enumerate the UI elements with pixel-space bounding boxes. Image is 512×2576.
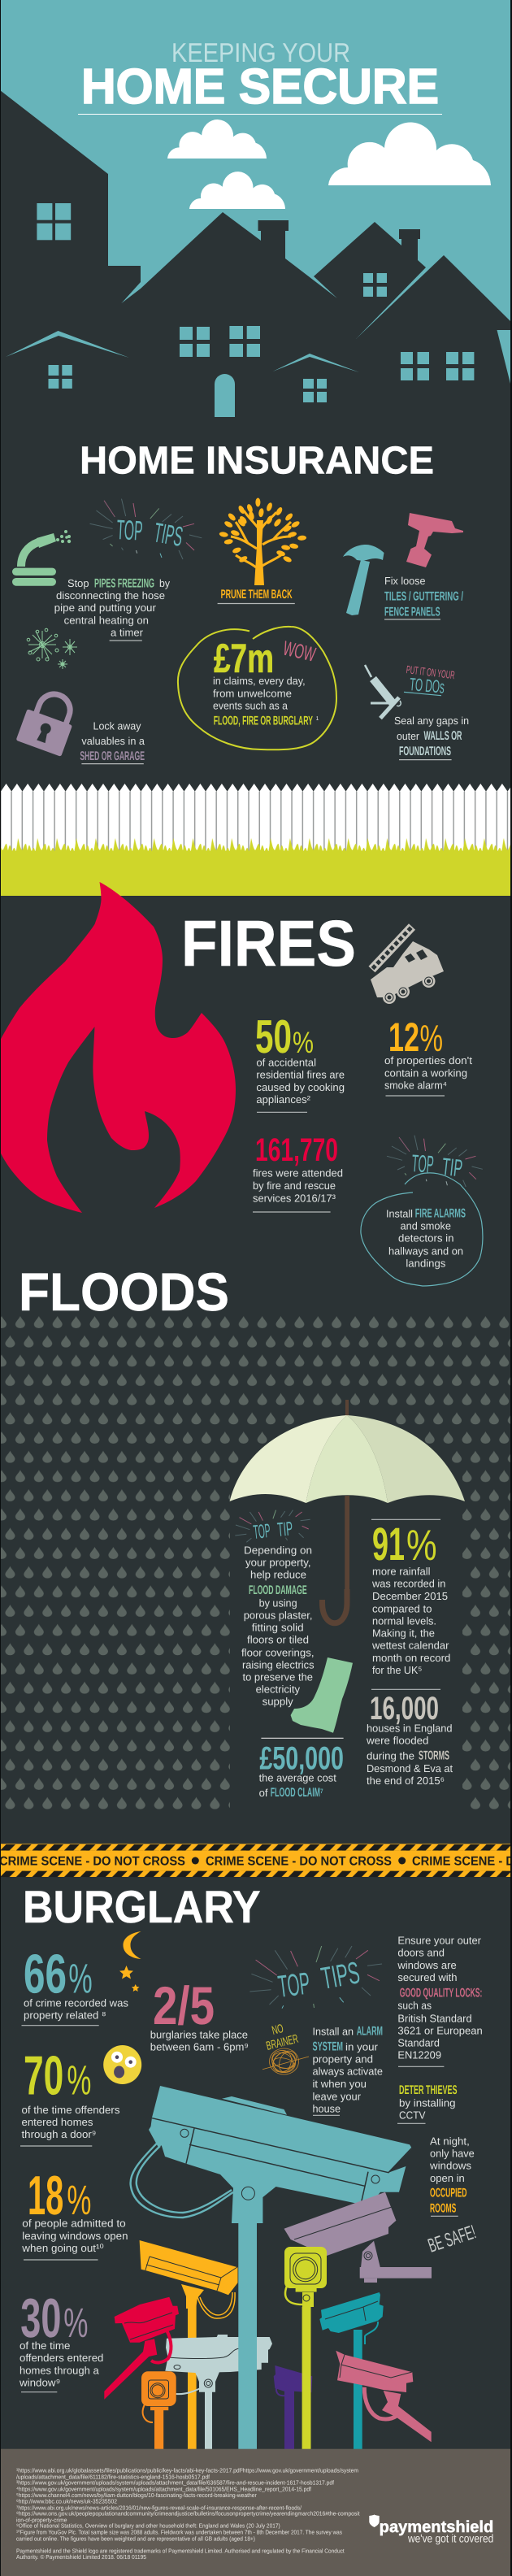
text: good quality locks: British Standard xyxy=(397,2012,472,2024)
stat: £50,000: FLOOD CLAIM⁷ xyxy=(271,1786,323,1800)
top tips badge: TOP xyxy=(116,515,144,547)
footnotes: ³https://www.gov.uk/government/uploads/system/uploads/attachment_data/file/636587/fire-and-rescue-incident-1617-hosb1317.pdf xyxy=(16,2479,334,2487)
panel: burglary xyxy=(19,1881,483,2449)
stat: 30%: homes through a xyxy=(20,2364,99,2376)
scribble xyxy=(263,2046,309,2077)
grass blades xyxy=(0,837,512,857)
stat: 30% xyxy=(19,2287,103,2392)
footnotes: ⁴https://www.gov.uk/government/uploads/system/uploads/attachment_data/file/501065/EHS_Headline_report_2014-15.pdf xyxy=(16,2485,311,2492)
text: seal any gaps xyxy=(394,715,469,760)
text: install alarm: ALARM xyxy=(357,2024,383,2038)
claims highlight: FLOOD, FIRE OR BURGLARY xyxy=(214,714,313,728)
stat: 30%: of the time xyxy=(20,2339,70,2352)
icon: wellington boot xyxy=(291,1657,353,1733)
stat: 18%: % xyxy=(67,2177,91,2223)
footnotes: ¹⁰Figure from YouGov Plc. Total sample size was 2088 adults. Fieldwork was undertaken between 7th - 8th December 2017. The survey was xyxy=(16,2529,342,2536)
stat: 91%: for the UK⁵ xyxy=(372,1664,423,1676)
text: lock away: Lock away xyxy=(93,720,141,732)
text: stop pipes freezing: Stop xyxy=(67,577,89,589)
footnotes xyxy=(16,2467,360,2561)
footnotes: Authority. © Paymentshield Limited 2018. 06/18 01195 xyxy=(16,2553,146,2561)
tip copy: your property, xyxy=(245,1557,310,1569)
text: stop pipes freezing: PIPES FREEZING xyxy=(94,577,154,590)
rays xyxy=(235,1510,310,1542)
icon: shield xyxy=(369,2514,380,2527)
rays xyxy=(387,1136,483,1187)
icon: fire engine xyxy=(371,927,444,1004)
text: stop pipes freezing: pipe and putting your xyxy=(54,602,157,614)
panel: footer xyxy=(0,2449,512,2576)
stat: £50,000: £50,000 xyxy=(259,1741,344,1777)
tip copy line 3: detectors in xyxy=(398,1232,453,1245)
stat: 91%: % xyxy=(406,1522,437,1570)
house details: windows, door and eaves xyxy=(6,203,512,417)
icon: cloud small xyxy=(167,119,267,159)
top tips lettering second word: TIPS xyxy=(319,1956,362,1996)
panel: home insurance xyxy=(0,439,512,896)
top tip lettering second word: TIP xyxy=(440,1153,464,1183)
text: stop pipes freezing: by xyxy=(159,577,170,589)
camera: pale grey xyxy=(165,2335,272,2449)
tip copy: electricity xyxy=(256,1683,300,1696)
camera: large teal xyxy=(131,2086,412,2449)
stat: 91%: was recorded in xyxy=(371,1578,445,1590)
stat: 161,770: by fire and rescue xyxy=(253,1179,336,1192)
stat: 50%: caused by cooking xyxy=(256,1081,345,1093)
stat: 30%: 30 xyxy=(20,2287,62,2349)
stat: 50%: 50 xyxy=(255,1010,292,1063)
grass xyxy=(0,837,512,896)
tip copy: by using xyxy=(259,1597,297,1609)
stat: £50,000 xyxy=(259,1738,344,1800)
tip copy: supply xyxy=(263,1696,293,1708)
stat: 16,000: houses in England xyxy=(367,1722,452,1735)
stat: 66%: property related ⁸ xyxy=(24,2009,106,2022)
house silhouettes xyxy=(0,90,512,439)
heading: fires: FIRES xyxy=(181,907,356,980)
text: install alarm: SYSTEM xyxy=(312,2040,343,2053)
stat: 16,000: during the xyxy=(367,1749,414,1761)
camera: crimson xyxy=(104,2297,179,2400)
icon: tree xyxy=(219,497,306,585)
text: occupied rooms: ROOMS xyxy=(430,2202,456,2216)
text: install alarm: Install an xyxy=(312,2025,354,2037)
stat: 91%: normal levels. xyxy=(372,1614,436,1627)
stat: 66% xyxy=(21,1944,128,2026)
heading: home insurance: HOME INSURANCE xyxy=(80,439,434,483)
text: install alarm: it when you xyxy=(312,2078,367,2090)
rain cut-out xyxy=(230,1409,462,1821)
stat: 66%: 66 xyxy=(24,1944,67,2005)
stat: £50,000: the average cost xyxy=(259,1772,336,1784)
stat: 70%: of the time offenders xyxy=(21,2104,120,2116)
hand-drawn ring xyxy=(178,627,336,749)
text: good quality locks: Standard xyxy=(397,2036,440,2048)
footnotes: ⁶http://www.bbc.co.uk/news/uk-35235502 xyxy=(16,2497,117,2504)
sky xyxy=(0,0,512,439)
wow lettering: WOW xyxy=(281,637,318,667)
icon: drill xyxy=(406,513,463,567)
put it on your to dos note xyxy=(404,663,456,697)
stat: 18%: of people admitted to xyxy=(22,2217,126,2229)
stat: 161,770: services 2016/17³ xyxy=(253,1192,336,1204)
title rule xyxy=(78,114,442,115)
claims copy: in claims, every day, xyxy=(213,675,306,687)
picket gaps xyxy=(0,792,512,857)
footnotes: carried out online. The figures have been weighted and are representative of all GB adults (aged 18+) xyxy=(16,2535,255,2542)
fence xyxy=(0,784,512,857)
text: good quality locks: secured with xyxy=(397,1971,457,1983)
stat: 18%: leaving windows open xyxy=(22,2230,128,2242)
footnotes: ⁷https://www.abi.org.uk/news/news-articles/2016/01/new-figures-reveal-scale-of-insurance-response-after-recent-floods/ xyxy=(16,2504,302,2511)
panel: fires xyxy=(0,882,483,1286)
tip copy line 5: landings xyxy=(406,1257,446,1269)
tip copy line 2: and smoke xyxy=(400,1220,451,1232)
stat: 161,770: fires were attended xyxy=(253,1167,343,1179)
tip copy: floor coverings, xyxy=(241,1646,314,1658)
tip copy: porous plaster, xyxy=(244,1609,312,1622)
stat: 50%: % xyxy=(293,1026,314,1059)
title: home secure: HOME SECURE xyxy=(81,59,439,114)
text: fix loose: TILES / GUTTERING / xyxy=(384,590,463,604)
stat: 16,000: were flooded xyxy=(366,1735,429,1747)
icon: hammer xyxy=(343,545,384,615)
icon: snowflakes xyxy=(27,628,77,669)
stat: 30%: offenders entered xyxy=(20,2352,103,2364)
heading: burglary: BURGLARY xyxy=(23,1881,261,1932)
top tip: fire alarms: TOP xyxy=(411,1150,435,1179)
title: keeping your: KEEPING YOUR xyxy=(171,37,350,67)
footnotes: ion-of-property-crime xyxy=(16,2516,67,2523)
stat: 16,000 xyxy=(366,1691,453,1787)
top tip: fire alarms xyxy=(361,1136,483,1286)
stat: 16,000: STORMS xyxy=(419,1748,449,1762)
camera: mauve xyxy=(284,2192,432,2283)
callout: £7m in claims xyxy=(178,627,336,749)
icon: shocked emoji xyxy=(103,2045,141,2084)
stat: 2/5: burglaries take place xyxy=(150,2029,248,2041)
stat: 12%: contain a working xyxy=(384,1066,467,1079)
text: lock away: valuables in a xyxy=(81,735,145,747)
stat: 12%: % xyxy=(419,1017,443,1059)
stat: £50,000: of xyxy=(259,1787,268,1799)
text: occupied rooms: windows xyxy=(429,2160,472,2172)
text: fix loose: FENCE PANELS xyxy=(384,605,440,619)
top tip: flood damage: TOP xyxy=(252,1520,271,1544)
footnotes: ¹https://www.abi.org.uk/globalassets/files/publications/public/key-facts/abi-key-facts-2017.pdf²https://www.gov.uk/government/uploads/system xyxy=(16,2467,358,2474)
crime scene tape: CRIME SCENE - DO NOT CROSS xyxy=(0,1855,185,1868)
stat: 18%: when going out¹⁰ xyxy=(21,2242,104,2254)
claims copy line 2: from unwelcome xyxy=(213,688,292,699)
top tip lettering second word: TIP xyxy=(276,1518,293,1541)
heading: floods: FLOODS xyxy=(19,1262,229,1322)
stat: 16,000: the end of 2015⁶ xyxy=(367,1775,445,1787)
tip copy: FLOOD DAMAGE xyxy=(249,1583,307,1597)
stat: 30%: % xyxy=(63,2300,88,2346)
text: seal any gaps: FOUNDATIONS xyxy=(399,745,451,758)
tip copy: raising electrics xyxy=(242,1658,315,1670)
tip copy xyxy=(241,1544,315,1708)
text: good quality locks: such as xyxy=(397,2000,432,2012)
footnotes: ⁵https://www.channel4.com/news/by/liam-dutton/blogs/10-fascinating-facts-record-breaking-weather xyxy=(16,2491,257,2499)
claims copy line 3: events such as a xyxy=(213,699,289,712)
top tips badge xyxy=(89,499,202,559)
stat: 91%: compared to xyxy=(372,1602,432,1614)
icon: cloud middle xyxy=(189,172,285,209)
stat: 70%: through a door⁹ xyxy=(21,2128,96,2140)
crime scene tape: CRIME SCENE - DO NOT CROSS xyxy=(206,1855,392,1868)
paymentshield logo xyxy=(369,2514,493,2545)
text: seal any gaps: WALLS OR xyxy=(424,729,462,743)
camera: pink xyxy=(336,2351,432,2442)
tip copy: to preserve the xyxy=(242,1670,313,1683)
text: prune them back: PRUNE THEM BACK xyxy=(221,588,293,602)
footnotes: ⁸https://www.ons.gov.uk/peoplepopulationandcommunity/crimeandjustice/bulletins/focusonpropertycrime/yearendingmarch2016#the-composit xyxy=(16,2510,360,2517)
icon: moon and stars xyxy=(119,1931,141,1992)
no brainer badge xyxy=(263,2022,309,2077)
text: prune them back xyxy=(218,588,295,603)
stat: 50%: of accidental xyxy=(256,1057,316,1069)
stat: 16,000: Desmond & Eva at xyxy=(367,1762,453,1775)
stat: 2/5 xyxy=(150,1975,249,2053)
stat: 12%: 12 xyxy=(388,1014,419,1060)
strapline: we've got it covered xyxy=(407,2532,493,2545)
camera: orange xyxy=(141,2371,176,2449)
put it on your to dos note: PUT IT ON YOUR xyxy=(406,663,456,681)
footer background xyxy=(0,2449,512,2576)
text: install alarm: property and xyxy=(312,2053,373,2066)
stat: 91%: Making it, the xyxy=(372,1627,435,1640)
tip copy line 4: hallways and on xyxy=(388,1245,463,1257)
stat: 70%: entered homes xyxy=(21,2116,93,2128)
text: stop pipes freezing xyxy=(54,577,170,641)
text: good quality locks: 3621 or European xyxy=(397,2024,483,2036)
top tips lettering: TOP xyxy=(276,1966,312,2005)
icon: padlock xyxy=(16,686,80,757)
no brainer lettering second word: BRAINER xyxy=(265,2032,300,2053)
top tip: flood damage xyxy=(235,1510,315,1708)
text: deter thieves xyxy=(397,2083,457,2123)
icon: caulk gun xyxy=(365,665,401,719)
rain pattern xyxy=(0,1316,510,1810)
stat: 70%: % xyxy=(67,2057,91,2104)
stat: 70% xyxy=(20,2045,120,2146)
tip highlight: FIRE ALARMS xyxy=(415,1206,466,1220)
stat: 50%: residential fires are xyxy=(256,1069,345,1081)
tip copy: help reduce xyxy=(250,1569,306,1581)
footnotes: /uploads/attachment_data/file/611182/fire-statistics-england-1516-hosb0517.pdf xyxy=(16,2473,210,2480)
text: install alarm xyxy=(312,2024,383,2115)
stat: 91%: wettest calendar xyxy=(371,1640,449,1652)
stat: 91%: December 2015 xyxy=(372,1590,448,1602)
stat: 16,000: 16,000 xyxy=(370,1691,439,1727)
stat: 18% xyxy=(21,2165,128,2260)
rays xyxy=(249,1946,382,2009)
text: occupied rooms: OCCUPIED xyxy=(430,2187,466,2200)
camera: dark purple xyxy=(274,2365,312,2449)
stat: 2/5: between 6am - 6pm⁹ xyxy=(150,2041,249,2053)
text: install alarm: house xyxy=(312,2102,341,2114)
panel: header xyxy=(0,0,512,439)
stat: 91%: month on record xyxy=(372,1652,450,1664)
text: install alarm: always activate xyxy=(312,2066,383,2078)
top tips badge xyxy=(249,1946,382,2009)
text: fix loose xyxy=(384,575,463,619)
panel: floods xyxy=(0,1262,510,1821)
stat: 70%: 70 xyxy=(24,2045,63,2107)
text: good quality locks: EN12209 xyxy=(397,2048,441,2061)
tip copy: floors or tiled xyxy=(247,1634,309,1646)
stat: 18%: 18 xyxy=(28,2165,63,2226)
camera: lime xyxy=(284,2247,327,2449)
top tips lettering second word: TIPS xyxy=(152,517,185,553)
text: lock away xyxy=(80,720,145,764)
icon: umbrella xyxy=(229,1400,465,1623)
rays xyxy=(89,499,202,559)
text: seal any gaps: Seal any gaps in xyxy=(394,715,469,727)
text: install alarm: leave your xyxy=(312,2090,362,2102)
hand-drawn ring xyxy=(361,1173,483,1286)
text: occupied rooms: open in xyxy=(430,2172,465,2184)
no brainer lettering: NO xyxy=(271,2022,285,2038)
text: stop pipes freezing: a timer xyxy=(111,626,144,639)
icon: cloud large xyxy=(328,122,491,185)
grass strip xyxy=(0,855,512,896)
stat: 66%: of crime recorded was xyxy=(24,1996,128,2009)
stat: 30%: window⁹ xyxy=(19,2376,60,2388)
tip copy: fitting solid xyxy=(252,1622,304,1634)
text: good quality locks: doors and xyxy=(397,1947,445,1959)
stat: 91%: more rainfall xyxy=(372,1566,431,1578)
text: deter thieves: CCTV xyxy=(399,2109,426,2122)
stat: 12%: smoke alarm⁴ xyxy=(384,1079,447,1091)
footnotes: ⁹Office of National Statistics, Overview of burglary and other household theft: England and Wales (20 July 2017) xyxy=(16,2522,280,2530)
icon: hose xyxy=(12,530,71,586)
stat: 12%: of properties don't xyxy=(384,1054,472,1066)
claims footnote marker: 1 xyxy=(315,716,319,722)
pickets xyxy=(0,784,512,857)
text: fix loose: Fix loose xyxy=(384,575,426,587)
stat: 50%: appliances² xyxy=(256,1093,311,1106)
stat: 91%: 91 xyxy=(372,1518,405,1570)
text: stop pipes freezing: central heating on xyxy=(64,615,149,626)
put it on your to dos note: TO DOs xyxy=(409,674,445,697)
text: install alarm: in your xyxy=(345,2040,379,2053)
footnotes: Paymentshield and the Shield logo are registered trademarks of Paymentshield Limited. Authorised and regulated by the Financial Conduct xyxy=(16,2547,345,2554)
text: stop pipes freezing: disconnecting the hose xyxy=(56,589,165,602)
text: occupied rooms: At night, xyxy=(430,2135,470,2147)
text: deter thieves: by installing xyxy=(399,2097,455,2109)
£7m figure: £7m xyxy=(214,636,274,681)
text: occupied rooms xyxy=(429,2135,475,2216)
text: occupied rooms: only have xyxy=(430,2147,475,2159)
stat: 2/5: 2/5 xyxy=(153,1975,215,2035)
tip copy: Install xyxy=(386,1207,413,1219)
icon: flame xyxy=(0,882,236,1213)
text: good quality locks: Ensure your outer xyxy=(397,1935,482,1947)
stat: 12% xyxy=(384,1014,472,1096)
text: good quality locks xyxy=(397,1935,483,2066)
stat: 161,770: 161,770 xyxy=(255,1132,338,1168)
tip copy: Depending on xyxy=(244,1544,312,1557)
text: seal any gaps: outer xyxy=(397,730,420,742)
crime scene tape xyxy=(0,1844,512,1877)
stat: 161,770 xyxy=(253,1132,343,1212)
text: deter thieves: DETER THIEVES xyxy=(399,2083,457,2097)
text: good quality locks: windows are xyxy=(397,1959,457,1971)
stat: 91% xyxy=(371,1518,450,1689)
stat: 50% xyxy=(255,1010,345,1112)
camera: yellow-orange xyxy=(140,2240,237,2449)
wordmark: paymentshield xyxy=(380,2518,493,2536)
cctv cameras illustration xyxy=(104,2086,432,2449)
stat: 66%: % xyxy=(68,1956,93,2002)
camera: dark teal xyxy=(319,2292,384,2449)
text: lock away: SHED OR GARAGE xyxy=(80,749,145,763)
